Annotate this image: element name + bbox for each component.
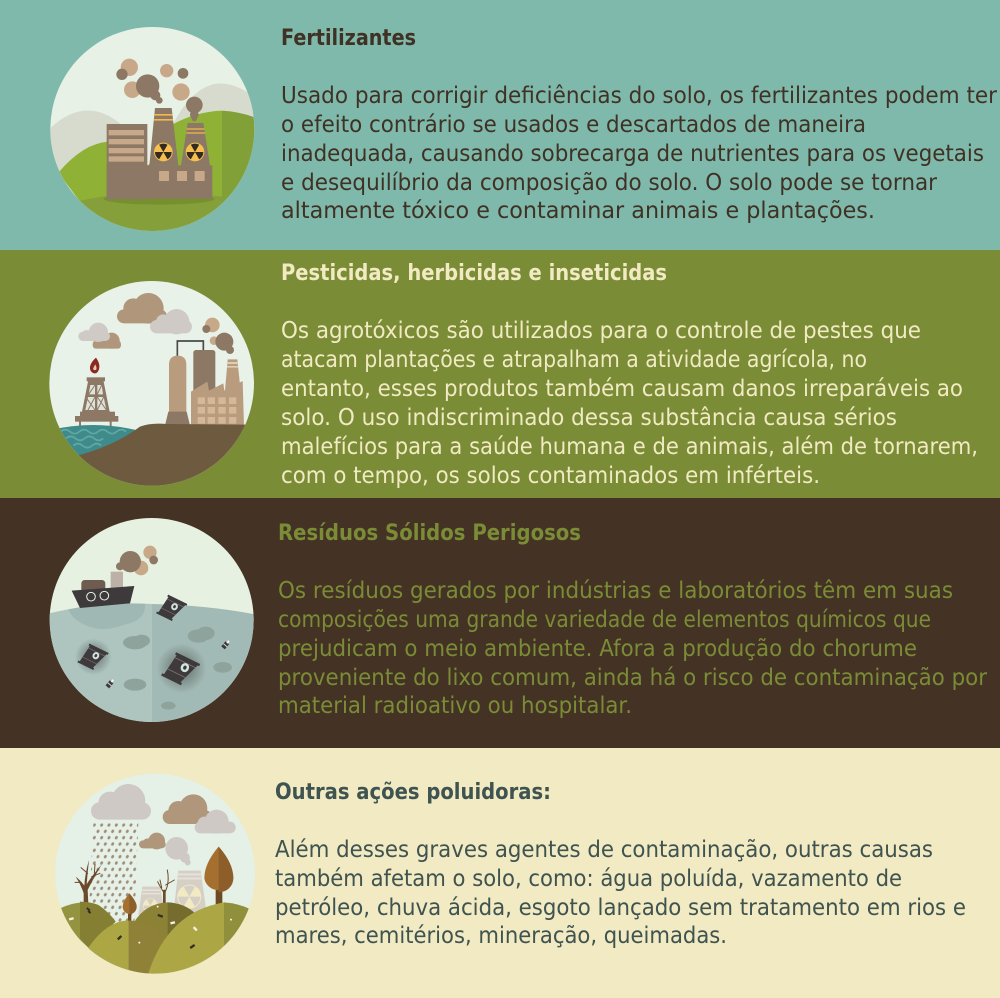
text block: pesticidas: Os agrotóxicos são utilizados para o controle de pestes que [281,318,921,344]
heading: outras acoes poluidoras: Outras ações poluidoras: [275,780,551,805]
text block: outras acoes poluidoras: Além desses graves agentes de contaminação, outras causas [275,837,933,863]
heading: residuos solidos: Resíduos Sólidos Perigosos [278,521,581,546]
text block: outras acoes poluidoras: petróleo, chuva ácida, esgoto lançado sem tratamento em rios e [275,895,966,921]
text block: fertilizantes: altamente tóxico e contaminar animais e plantações. [281,198,875,224]
text block: pesticidas [281,318,978,489]
icon: oil rig and refinery [49,281,254,486]
text block: pesticidas: solo. O uso indiscriminado dessa substância causa sérios [281,405,897,431]
panel: pesticidas [0,250,1000,498]
text block: fertilizantes: o efeito contrário se usados e descartados de maneira [281,112,866,138]
text block: residuos solidos: Os resíduos gerados por indústrias e laboratórios têm em suas [278,578,953,604]
heading: fertilizantes: Fertilizantes [281,26,416,51]
text block: outras acoes poluidoras: também afetam o solo, como: água poluída, vazamento de [275,866,902,892]
panel: fertilizantes [0,0,1000,250]
text block: pesticidas: entanto, esses produtos também causam danos irreparáveis ao [281,376,963,402]
text block: fertilizantes: e desequilíbrio da composição do solo. O solo pode se tornar [281,170,937,196]
text block: residuos solidos: composições uma grande variedade de elementos químicos que [278,607,931,633]
text block: pesticidas: atacam plantações e atrapalham a atividade agrícola, no [281,347,867,373]
text block: outras acoes poluidoras [275,837,966,949]
panel: outras acoes poluidoras [0,748,1000,998]
panel: residuos solidos [0,498,1000,748]
icon: acid rain over hills [55,774,255,974]
icon: nuclear factory on green hills [50,27,254,231]
text block: residuos solidos [278,578,987,719]
heading: pesticidas: Pesticidas, herbicidas e inseticidas [281,261,667,286]
text block: pesticidas: com o tempo, os solos contaminados em inférteis. [281,463,820,489]
icon: ship and sinking barrels [50,518,254,722]
text block: outras acoes poluidoras: mares, cemitérios, mineração, queimadas. [275,923,727,949]
text block: residuos solidos: material radioativo ou hospitalar. [278,693,632,719]
text block: residuos solidos: prejudicam o meio ambiente. Afora a produção do chorume [278,636,917,662]
text block: fertilizantes [281,83,998,224]
